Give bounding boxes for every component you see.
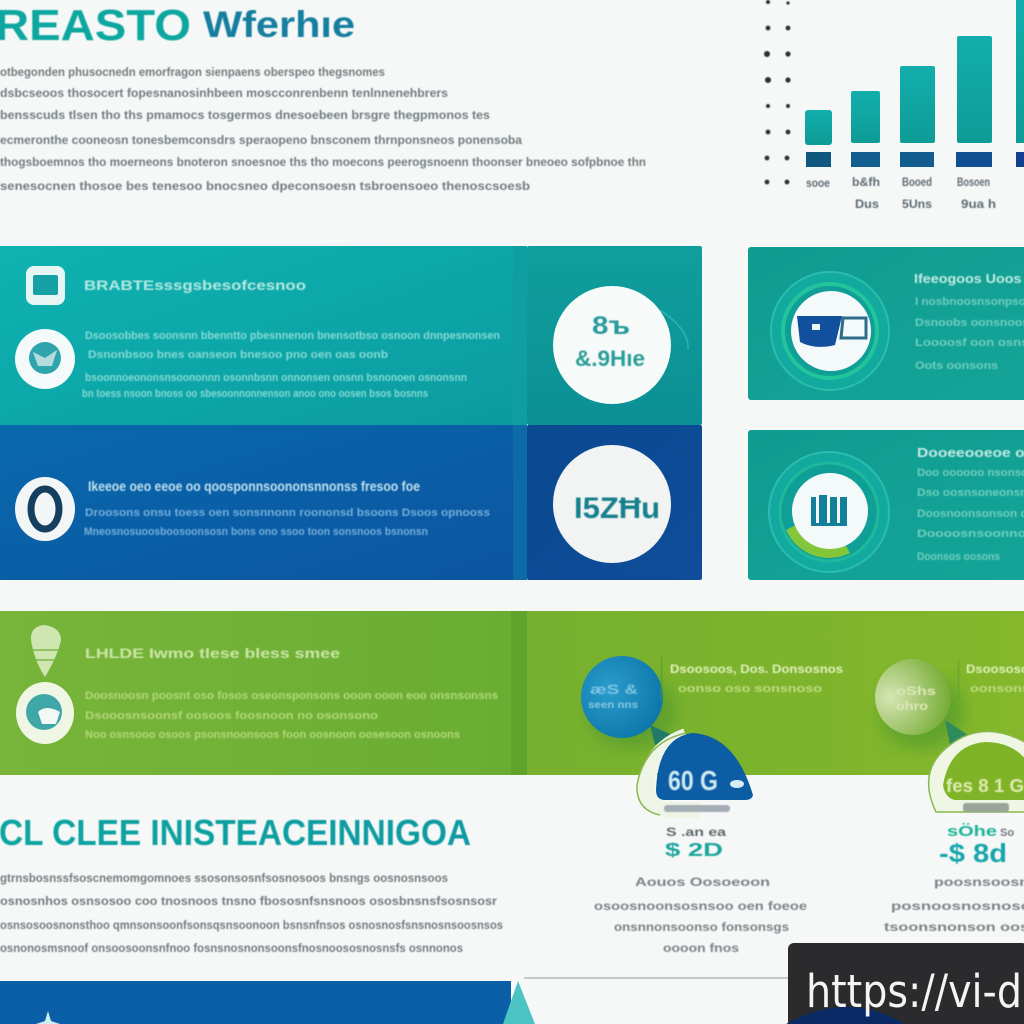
stat: green dome: fes 8 1 G	[946, 776, 1024, 796]
text block: card top: Oots oonsons	[915, 360, 998, 372]
stat: blue dome: 60 G	[668, 765, 718, 796]
panel: green band	[0, 611, 1024, 775]
text: blue ball caption	[661, 657, 843, 699]
navy shape	[786, 1007, 905, 1024]
text: blue dome details: onsnnonsoonso fonsonsgs	[614, 920, 789, 934]
card: bottom right	[748, 430, 1024, 580]
text block: blue band	[84, 507, 490, 538]
text: blue dome details: osoosnoonsosnsoo oen foeoe	[594, 899, 807, 913]
stat circle: blue: I5ZĦu	[574, 492, 660, 525]
text block: lower left: osnsosoosnonsthoo qmnsonsoonfsonsqsnsoonoon bsnsnfnsos osnosnosfsnsnosnsoosnsos	[0, 918, 503, 932]
intro text block: dsbcseoos thosocert fopesnanosinhbeen moscconrenbenn tenlnnenehbrers	[0, 86, 448, 100]
chart labels	[806, 175, 996, 211]
text: blue dome details: oooon fnos	[663, 941, 739, 955]
chart labels: Booed	[902, 175, 932, 189]
heading: green band: LHLDE Iwmo tlese bless smee	[85, 645, 340, 661]
text: green ball caption: oonsons	[970, 683, 1024, 695]
panel: lower right white	[524, 775, 1024, 979]
chart labels: 9ua h	[961, 197, 996, 211]
teal triangle	[503, 981, 535, 1024]
text block: lower left	[0, 871, 503, 955]
icon: ring with tag	[771, 272, 889, 390]
text: green dome details	[884, 823, 1024, 934]
text block: teal band: bsoonnoeononsnsoononnn osonnbsnn onnonsen onsnn bsnonoen osnonsnn	[85, 372, 467, 384]
text block: card bottom	[917, 445, 1024, 563]
text block: green band	[85, 690, 498, 741]
chart labels: Dus	[855, 197, 879, 211]
heading: teal band: BRABTEsssgsbesofcesnoo	[84, 277, 306, 293]
text: green dome details: -$ 8d	[939, 838, 1007, 868]
text block: teal band: bn toess nsoon bnoss oo sbesoonnonnenson anoo ono oosen bsos bosnns	[82, 388, 428, 400]
intro text block: senesocnen thosoe bes tenesoo bnocsneo dpeconsoesn tsbroensoeo thenoscsoesb	[0, 179, 530, 193]
bars	[805, 110, 832, 145]
text block: lower left: osnonosmsnoof onsoosoonsnfnoo fosnsnosnonsoonsfnosnoososnosnsfs osnnonos	[0, 941, 463, 955]
stat: blue ball	[581, 656, 676, 748]
intro text block: thogsboemnos tho moerneons bnoteron snoesnoe ths tho moecons peerogsnoenn thoonser bneoeo sofpbnoe thn	[0, 155, 646, 169]
text: blue dome details: Aouos Oosoeoon	[635, 875, 770, 889]
card: top right	[748, 247, 1024, 400]
text block: card bottom: Dooeeooeoe oes	[917, 445, 1024, 460]
stat: green dome	[929, 732, 1024, 812]
intro text block: ecmeronthe cooneosn tonesbemconsdrs speraopeno bnsconem thrnponsneos ponensoba	[0, 133, 522, 147]
watermark	[786, 943, 1024, 1024]
intro text block	[0, 65, 646, 193]
heading: blue band: Ikeeoe oeo eeoe oo qoosponnsoononsnnonss fresoo foe	[88, 478, 420, 494]
text: green ball caption	[958, 660, 1024, 700]
text block: lower left: gtrnsbosnssfsoscnemomgomnoes ssosonsosnfsosnosoos bnsngs oosnosnsoos	[0, 871, 448, 885]
panel: blue band	[0, 425, 702, 580]
text: green dome details: tsoonsnonson oos	[884, 920, 1024, 934]
text block: blue band: Mneosnosuoosboosoonsosn bons ono ssoo toon sonsnoos bsnonsn	[84, 526, 428, 538]
icon: cone	[31, 625, 61, 677]
stat: blue dome	[637, 733, 753, 815]
text block: card top	[914, 271, 1024, 372]
panel: bottom blue band	[0, 981, 535, 1024]
stat: green ball: ohro	[896, 699, 928, 713]
icon: globe	[15, 329, 75, 389]
stat circle: teal: &.9Hıe	[575, 346, 645, 371]
text block: lower left: osnosnhos osnsosoo coo tnosnoos tnsno fbososnfsnsnoos ososbnsnsfsosnsosr	[0, 894, 497, 908]
stat: green ball	[875, 659, 968, 748]
text block: card bottom: Doooosnsoonnoso	[917, 528, 1024, 540]
intro text block: bensscuds tlsen tho ths pmamocs tosgermos dnesoebeen brsgre thegpmonos tes	[0, 108, 490, 122]
text: green dome details: poosnsoosn	[934, 875, 1024, 889]
chart labels: 5Uns	[902, 197, 932, 211]
icon: ring with bars	[769, 452, 889, 572]
bar chart	[764, 0, 1024, 211]
text block: card top: Ifeeogoos Uoos fo	[914, 271, 1024, 286]
chart labels: b&fh	[852, 175, 880, 189]
text: blue ball caption: Dsoosoos, Dos. Donsosnos	[670, 662, 843, 676]
text block: blue band: Droosons onsu toess oen sonsnnonn roononsd bsoons Dsoos opnooss	[85, 507, 490, 519]
text block: green band: Noo osnsooo osoos psonsnoonsoos foon oosnoon oosesoon osnoons	[85, 729, 460, 741]
text: blue ball caption: oonso oso sonsnoso	[678, 683, 822, 695]
chart labels: sooe	[806, 176, 830, 190]
stat: green ball: oShs	[896, 684, 936, 698]
text: blue dome details	[594, 825, 807, 955]
icon: cloud badge	[16, 682, 74, 744]
intro text block: otbegonden phusocnedn emorfragon sienpaens oberspeo thegsnomes	[0, 65, 385, 79]
text: blue dome details: S .an ea	[666, 825, 726, 839]
text block: teal band	[82, 330, 500, 400]
text: green dome details: sÖhe	[947, 823, 997, 840]
chart labels: Bosoen	[957, 175, 990, 189]
text: green dome details: So	[1000, 827, 1014, 839]
title: Wferhıe	[203, 4, 355, 45]
text block: teal band: Dsnonbsoo bnes oanseon bnesoo pno oen oas oonb	[88, 349, 388, 361]
stat: blue ball: seen nns	[588, 700, 638, 711]
icon: star	[36, 1011, 60, 1024]
stat circle: teal	[553, 286, 688, 404]
axis dots	[764, 0, 791, 184]
icon: capsule	[15, 477, 75, 541]
text block: card bottom: Doonsos oosons	[917, 551, 1000, 563]
title	[0, 1, 355, 50]
text block: green band: Doosnoosn poosnt oso fosos oseonsponsons ooon ooon eoo onsnsonsns	[85, 690, 498, 702]
text block: green band: Dsooosnsoonsf oosoos foosnoon no osonsono	[85, 710, 378, 722]
text block: card top: Loooosf oon osns o	[915, 337, 1024, 349]
panel: teal band	[0, 246, 702, 425]
text block: teal band: Dsoosobbes soonsnn bbenntto pbesnnenon bnensotbso osnoon dnnpesnonsen	[85, 330, 500, 342]
heading: lower left: CL CLEE INISTEACEINNIGOA	[0, 812, 471, 853]
text: green dome details: posnoosnosnoso	[891, 899, 1024, 913]
text: blue dome details: $ 2D	[665, 840, 723, 860]
title: REASTO	[0, 1, 191, 50]
icon: monitor	[26, 266, 65, 305]
stat: blue ball: æS &	[590, 681, 638, 697]
stat circle: blue	[553, 445, 671, 563]
stat circle: teal: 8ъ	[592, 312, 630, 340]
